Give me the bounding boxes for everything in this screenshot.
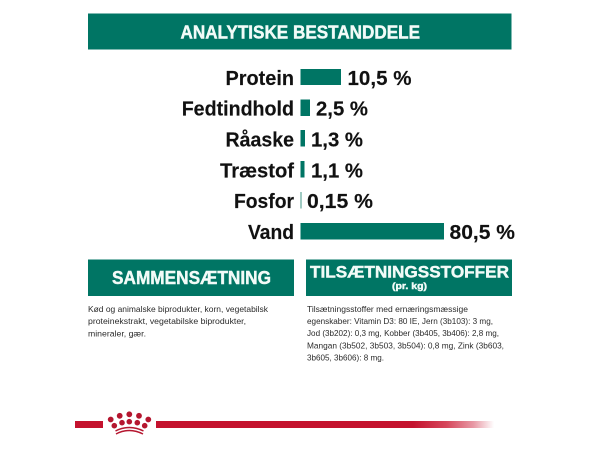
main header: analytiske bestanddele: ANALYTISKE BESTANDDELE: [180, 21, 420, 42]
row: raaske: [226, 129, 363, 152]
row: raaske: 1,3 %: [311, 129, 363, 152]
text: additives: Tilsætningsstoffer med ernæringsmæssige: [307, 304, 468, 314]
row: vand: Vand: [248, 221, 294, 244]
main header: analytiske bestanddele: [88, 14, 512, 50]
row: protein: Protein: [226, 67, 294, 90]
panel: tilsaetningsstoffer: [306, 260, 512, 362]
row: fedtindhold: [182, 98, 368, 121]
heading: sammensaetning: [88, 260, 294, 296]
row: fedtindhold: 2,5 %: [316, 98, 368, 121]
row: fosfor: 0,15 %: [307, 190, 373, 213]
icon: royal canin crown: [108, 411, 151, 434]
text: composition: mineraler, gær.: [88, 328, 146, 338]
heading: tilsaetningsstoffer: TILSÆTNINGSSTOFFER: [310, 263, 509, 282]
row: fedtindhold: Fedtindhold: [182, 98, 294, 121]
row: vand: 80,5 %: [450, 221, 515, 244]
row: traestof: 1,1 %: [311, 160, 363, 182]
heading: tilsaetningsstoffer: [306, 260, 512, 296]
footer: red line right fading: [156, 421, 494, 428]
text: additives: Mangan (3b502, 3b503, 3b504): 0,8 mg, Zink (3b603,: [307, 340, 504, 350]
row: traestof: Træstof: [220, 160, 294, 182]
text: additives: 3b605, 3b606): 8 mg.: [307, 352, 384, 362]
bar chart: analytical constituents: [182, 67, 515, 244]
row: fosfor: Fosfor: [234, 190, 294, 213]
heading: tilsaetningsstoffer: (pr. kg): [392, 281, 427, 292]
row: traestof: [220, 160, 363, 182]
row: vand: [248, 221, 515, 244]
footer: red line left: [75, 421, 103, 428]
row: fosfor: [234, 190, 373, 213]
text: composition: Kød og animalske biprodukter, korn, vegetabilsk: [88, 304, 269, 314]
text: additives: egenskaber: Vitamin D3: 80 IE, Jern (3b103): 3 mg,: [307, 316, 493, 326]
heading: sammensaetning: SAMMENSÆTNING: [112, 268, 271, 288]
row: raaske: Råaske: [226, 129, 294, 152]
text: composition: proteinekstrakt, vegetabilske biprodukter,: [88, 316, 246, 326]
row: protein: [226, 67, 412, 90]
panel: sammensaetning: [88, 260, 294, 338]
row: protein: 10,5 %: [348, 67, 412, 90]
text: additives: Jod (3b202): 0,3 mg, Kobber (3b405, 3b406): 2,8 mg,: [307, 328, 499, 338]
